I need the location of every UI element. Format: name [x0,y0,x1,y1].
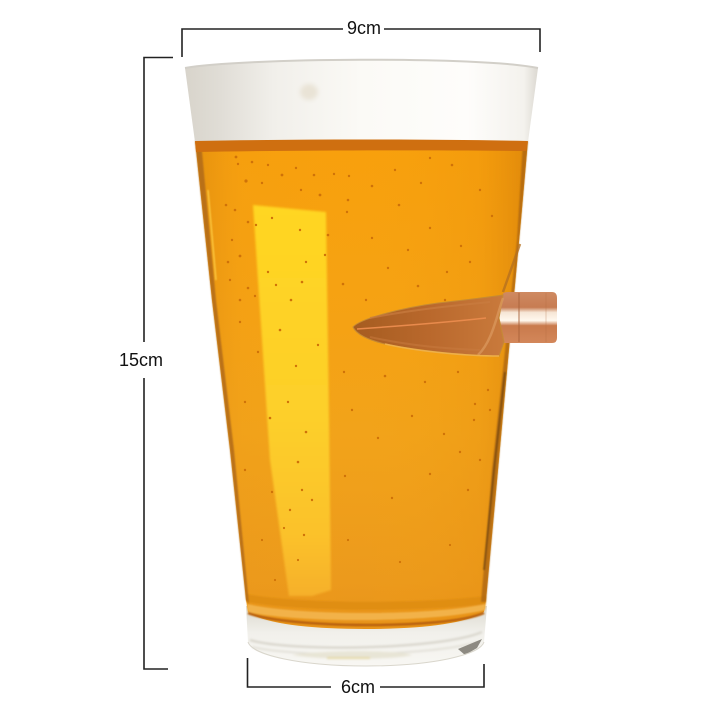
bullet nose embedded in beer [353,295,504,356]
dimension: top width 9cm: 9cm [347,18,381,38]
beer glass [185,60,538,666]
dimension: height 15cm [119,58,173,669]
foam head [185,60,538,142]
dimension: height 15cm: 15cm [119,350,163,370]
dimension: base width 6cm: 6cm [341,677,375,697]
bright yellow highlight [253,205,331,596]
glass base [246,606,487,666]
beer foam line [195,140,528,152]
glass right edge at bullet [503,244,520,292]
beer body [195,140,528,629]
beer bottom bands [246,594,486,625]
bubbles [225,156,493,581]
dimension: base width 6cm [248,658,484,697]
dimension: top width 9cm [182,18,540,57]
left edge strip [195,141,249,604]
bullet [353,292,557,356]
right edge strip [481,141,528,602]
bullet casing [499,292,557,343]
